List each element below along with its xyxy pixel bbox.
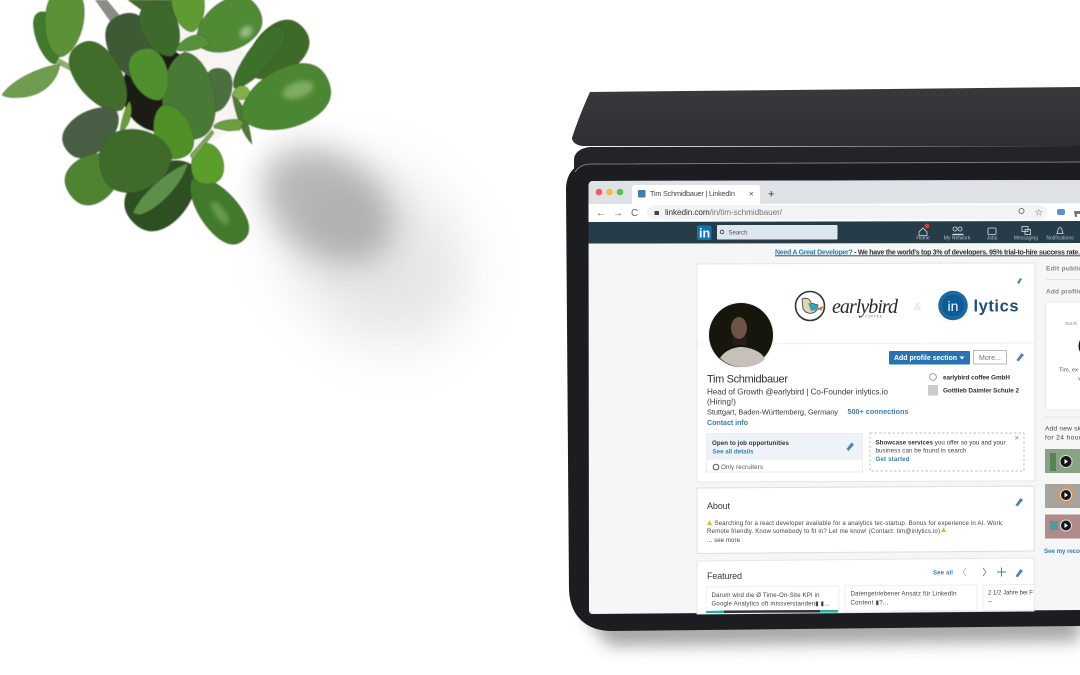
active tab bbox=[632, 185, 760, 204]
about body: Remote friendly. Know somebody to fit in? Let me know! (Contact: tim@inlytics.io) bbox=[707, 528, 940, 535]
avatar bbox=[708, 302, 774, 368]
plant bbox=[2, 0, 340, 253]
plant pot bbox=[106, 10, 250, 150]
plant stem bbox=[95, 0, 121, 24]
nav items: Jobs bbox=[987, 236, 998, 242]
new tab: + bbox=[768, 188, 774, 200]
panel: open to job opportunities: Open to job opportunities bbox=[712, 440, 790, 447]
nav buttons: C bbox=[631, 208, 638, 219]
featured card 2 bbox=[845, 585, 977, 611]
logo: earlybird: earlybird bbox=[832, 296, 899, 318]
panel: showcase services: Get started bbox=[876, 456, 910, 463]
nav buttons: ← bbox=[596, 208, 606, 219]
featured card 1: Google Analytics oft missverstanden▮ ▮... bbox=[712, 600, 830, 608]
recommendations link: See my reco bbox=[1044, 548, 1080, 555]
icon: edit pencil bbox=[1016, 498, 1023, 506]
plant cast shadow bbox=[240, 123, 502, 379]
button: add profile section: Add profile section bbox=[894, 355, 957, 362]
featured card 1 bbox=[706, 586, 839, 613]
headline: Head of Growth @earlybird | Co-Founder inlytics.io bbox=[707, 388, 888, 396]
button: more: More... bbox=[979, 355, 1001, 362]
panel: showcase services: × bbox=[1014, 434, 1020, 442]
featured heading: Featured bbox=[707, 571, 742, 581]
panel: about bbox=[697, 486, 1034, 554]
icon: cover edit pencil bbox=[1017, 278, 1022, 284]
contact info: Contact info bbox=[707, 418, 749, 427]
active tab: × bbox=[749, 190, 754, 198]
logo: inlytics: in bbox=[948, 298, 958, 314]
search box bbox=[717, 225, 838, 240]
panel: featured bbox=[697, 558, 1034, 614]
promo card bbox=[1046, 302, 1080, 410]
course thumbnail 3 bbox=[1045, 514, 1080, 538]
panel: showcase services: Showcase services you offer so you and your bbox=[876, 440, 1006, 446]
panel: open to job opportunities: Only recruiters bbox=[721, 464, 763, 471]
nav items: Messaging bbox=[1014, 236, 1038, 242]
school row: Gottlieb Daimler Schule 2 bbox=[943, 388, 1019, 394]
linkedin nav bar bbox=[588, 221, 1080, 244]
panel: showcase services: business can be found in search bbox=[876, 448, 967, 454]
course thumbnail 2 bbox=[1045, 484, 1080, 508]
url bar: ☆ bbox=[1034, 208, 1043, 218]
tablet cover flap bbox=[572, 87, 1080, 146]
panel: open to job opportunities: See all details bbox=[712, 448, 754, 456]
logo: earlybird bbox=[796, 292, 899, 320]
panel: profile card: (Hiring!) bbox=[707, 398, 736, 406]
featured card 1: Darum wird die Ø Time-On-Site KPI in bbox=[712, 592, 820, 599]
featured controls: See all bbox=[933, 570, 953, 576]
promo card: Tim, ex bbox=[1059, 368, 1078, 374]
panel: open to job opportunities bbox=[706, 434, 862, 472]
linkedin logo: in bbox=[699, 226, 710, 240]
about heading: About bbox=[707, 501, 730, 511]
extension icons bbox=[1057, 209, 1080, 217]
featured card 2: Datengetriebener Ansatz für LinkedIn bbox=[850, 590, 956, 598]
location and connections: Stuttgart, Baden-Württemberg, Germany bbox=[707, 408, 838, 416]
leaf highlights bbox=[208, 24, 316, 227]
leaves bbox=[2, 0, 340, 253]
nav items: My Network bbox=[944, 236, 971, 242]
promo card: Get th bbox=[1065, 321, 1078, 326]
tablet body bbox=[566, 161, 1080, 631]
active tab: Tim Schmidbauer | LinkedIn bbox=[650, 189, 735, 198]
toolbar bbox=[588, 204, 1080, 222]
learning promo text: Add new sk bbox=[1045, 426, 1080, 432]
about body: ... see more bbox=[707, 537, 741, 544]
tablet screen bbox=[588, 180, 1080, 614]
course thumbnail 1 bbox=[1045, 449, 1080, 473]
promo banner text: Need A Great Developer? - We have the world's top 3% of developers. 95% trial-to-hire success rate. bbox=[775, 250, 1080, 256]
featured controls bbox=[933, 568, 1023, 578]
panel: showcase services bbox=[870, 433, 1024, 471]
nav items: Home bbox=[916, 236, 930, 242]
nav items: Notifications bbox=[1046, 236, 1074, 242]
button: add profile section bbox=[889, 351, 970, 364]
screen content bbox=[588, 180, 1080, 614]
about body: Searching for a react developer available for a analytics tec-startup. Bonus for experience in AI. Work: bbox=[714, 520, 1004, 527]
panel: profile card bbox=[697, 263, 1035, 482]
search box: Search bbox=[728, 230, 748, 236]
tablet back case bbox=[574, 146, 1080, 180]
logo: earlybird: COFFEE bbox=[865, 314, 883, 318]
logo: inlytics bbox=[938, 291, 1018, 320]
panel: profile card: 500+ connections bbox=[848, 407, 908, 416]
icon: edit pencil bbox=[1016, 353, 1024, 362]
nav buttons: → bbox=[613, 208, 623, 219]
nav items bbox=[916, 224, 1074, 242]
soil bbox=[122, 48, 198, 132]
tablet bbox=[566, 87, 1080, 631]
employer row: earlybird coffee GmbH bbox=[943, 374, 1010, 382]
featured card 3 bbox=[983, 584, 1034, 610]
name: Tim Schmidbauer bbox=[707, 374, 788, 386]
nav buttons bbox=[596, 208, 638, 219]
button: more bbox=[974, 350, 1006, 364]
browser chrome bbox=[588, 180, 1080, 222]
school row bbox=[928, 385, 1019, 396]
featured card 2: Content ▮?... bbox=[850, 600, 889, 606]
tablet shadow bbox=[585, 614, 1080, 646]
about body bbox=[707, 520, 1004, 544]
ampersand: & bbox=[914, 301, 922, 313]
logo: inlytics: lytics bbox=[974, 298, 1018, 316]
right sidebar: for 24 hour bbox=[1045, 434, 1080, 442]
traffic lights bbox=[596, 189, 623, 195]
featured card 3: 2 1/2 Jahre bei F bbox=[988, 590, 1033, 596]
right sidebar bbox=[1044, 266, 1080, 555]
featured card 3: -- bbox=[988, 598, 992, 605]
url bar: linkedin.com/in/tim-schmidbauer/ bbox=[665, 208, 783, 217]
tab bar bbox=[588, 180, 1080, 204]
url bar bbox=[647, 205, 1047, 220]
